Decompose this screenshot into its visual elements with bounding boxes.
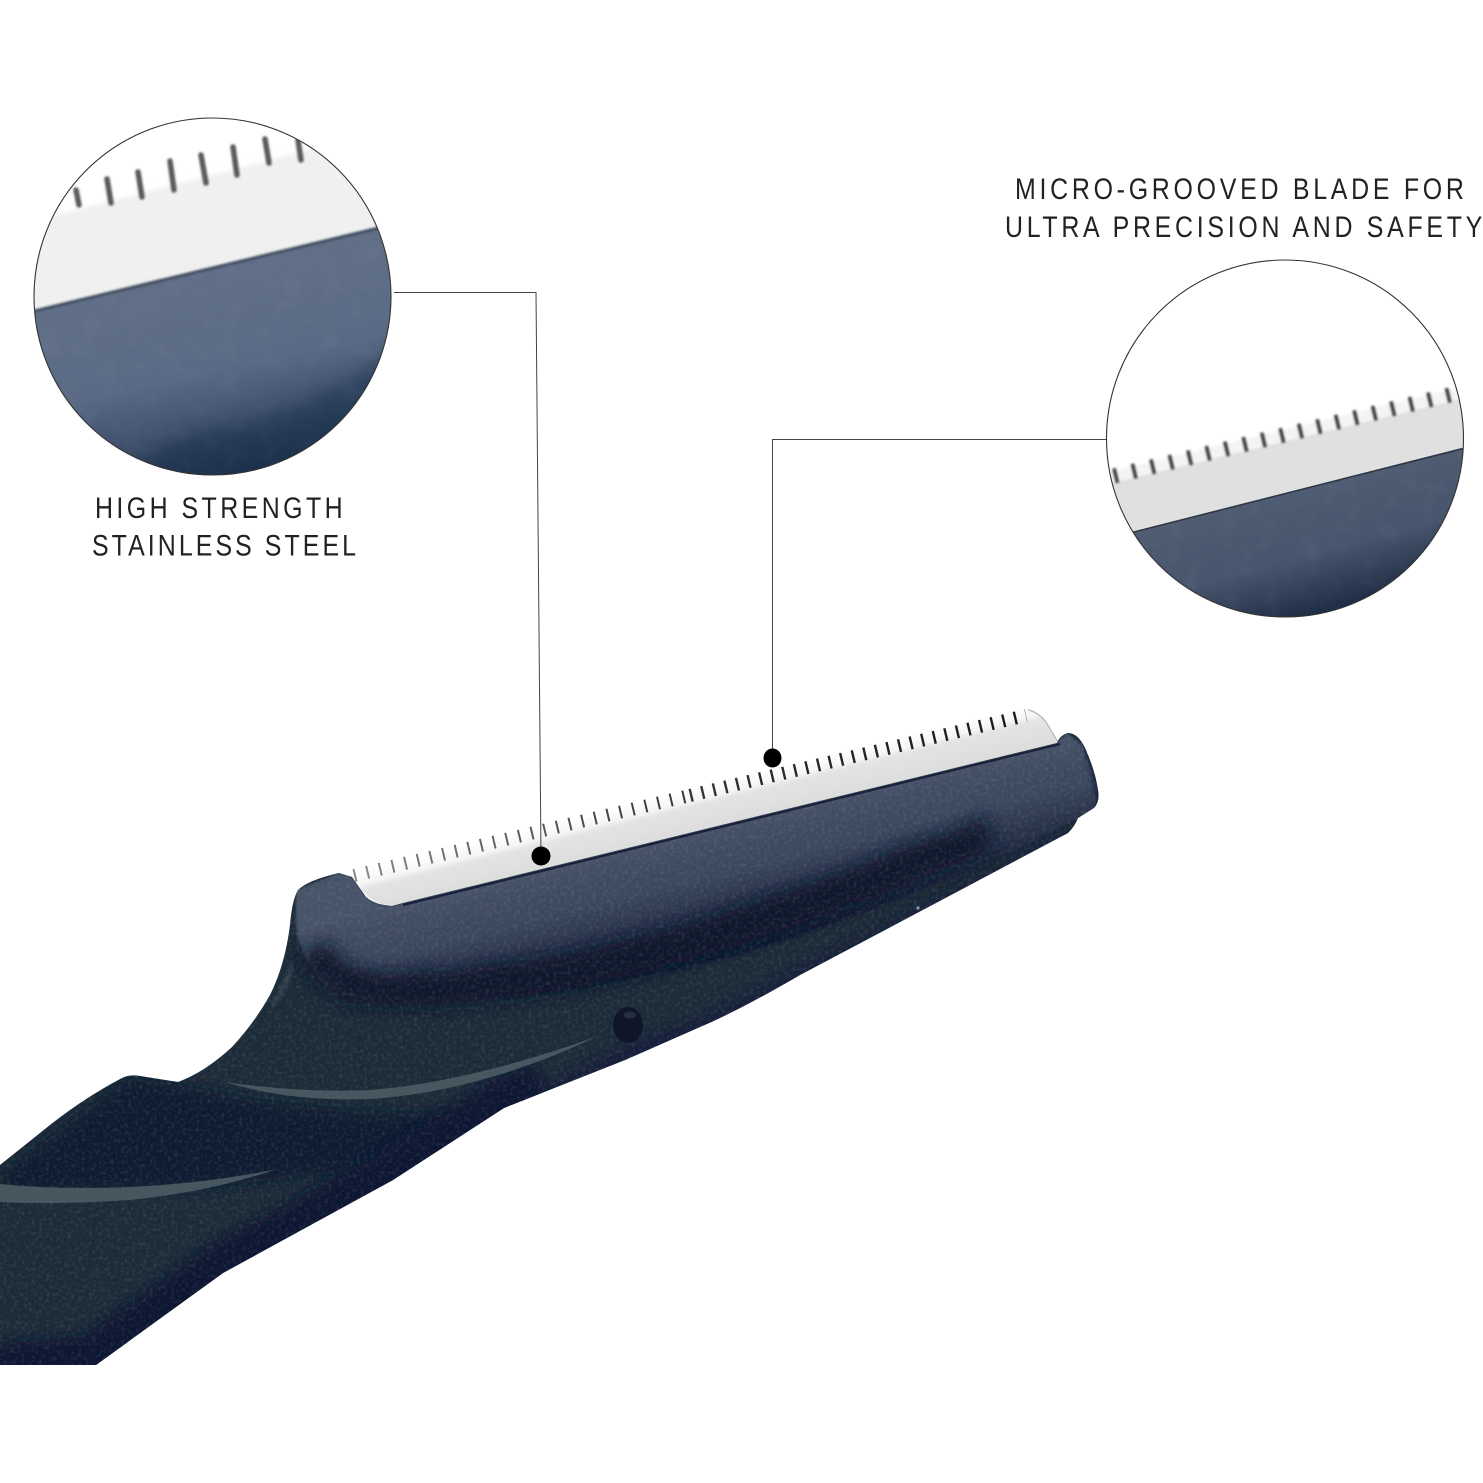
connector line right <box>772 440 1107 758</box>
connector line left <box>394 292 541 856</box>
magnifier circle left <box>30 115 395 480</box>
handle groove highlights <box>0 1036 598 1203</box>
magnifier circle right <box>1100 255 1470 625</box>
label left: HIGH STRENGTH <box>95 491 343 524</box>
label left <box>92 491 356 562</box>
label right <box>1005 172 1482 243</box>
callout left: high strength stainless steel <box>30 115 550 866</box>
product: razor with blade <box>0 708 1110 1375</box>
label right: ULTRA PRECISION AND SAFETY <box>1005 210 1482 243</box>
razor blade <box>352 708 1060 906</box>
anchor dot left <box>532 846 550 866</box>
small nick on the head <box>916 906 920 910</box>
handle rivet <box>613 1007 643 1043</box>
anchor dot right <box>764 748 782 768</box>
label left: STAINLESS STEEL <box>92 528 356 562</box>
razor handle <box>0 730 1110 1375</box>
callout right: micro-grooved blade <box>764 172 1482 768</box>
label right: MICRO-GROOVED BLADE FOR <box>1015 172 1464 205</box>
